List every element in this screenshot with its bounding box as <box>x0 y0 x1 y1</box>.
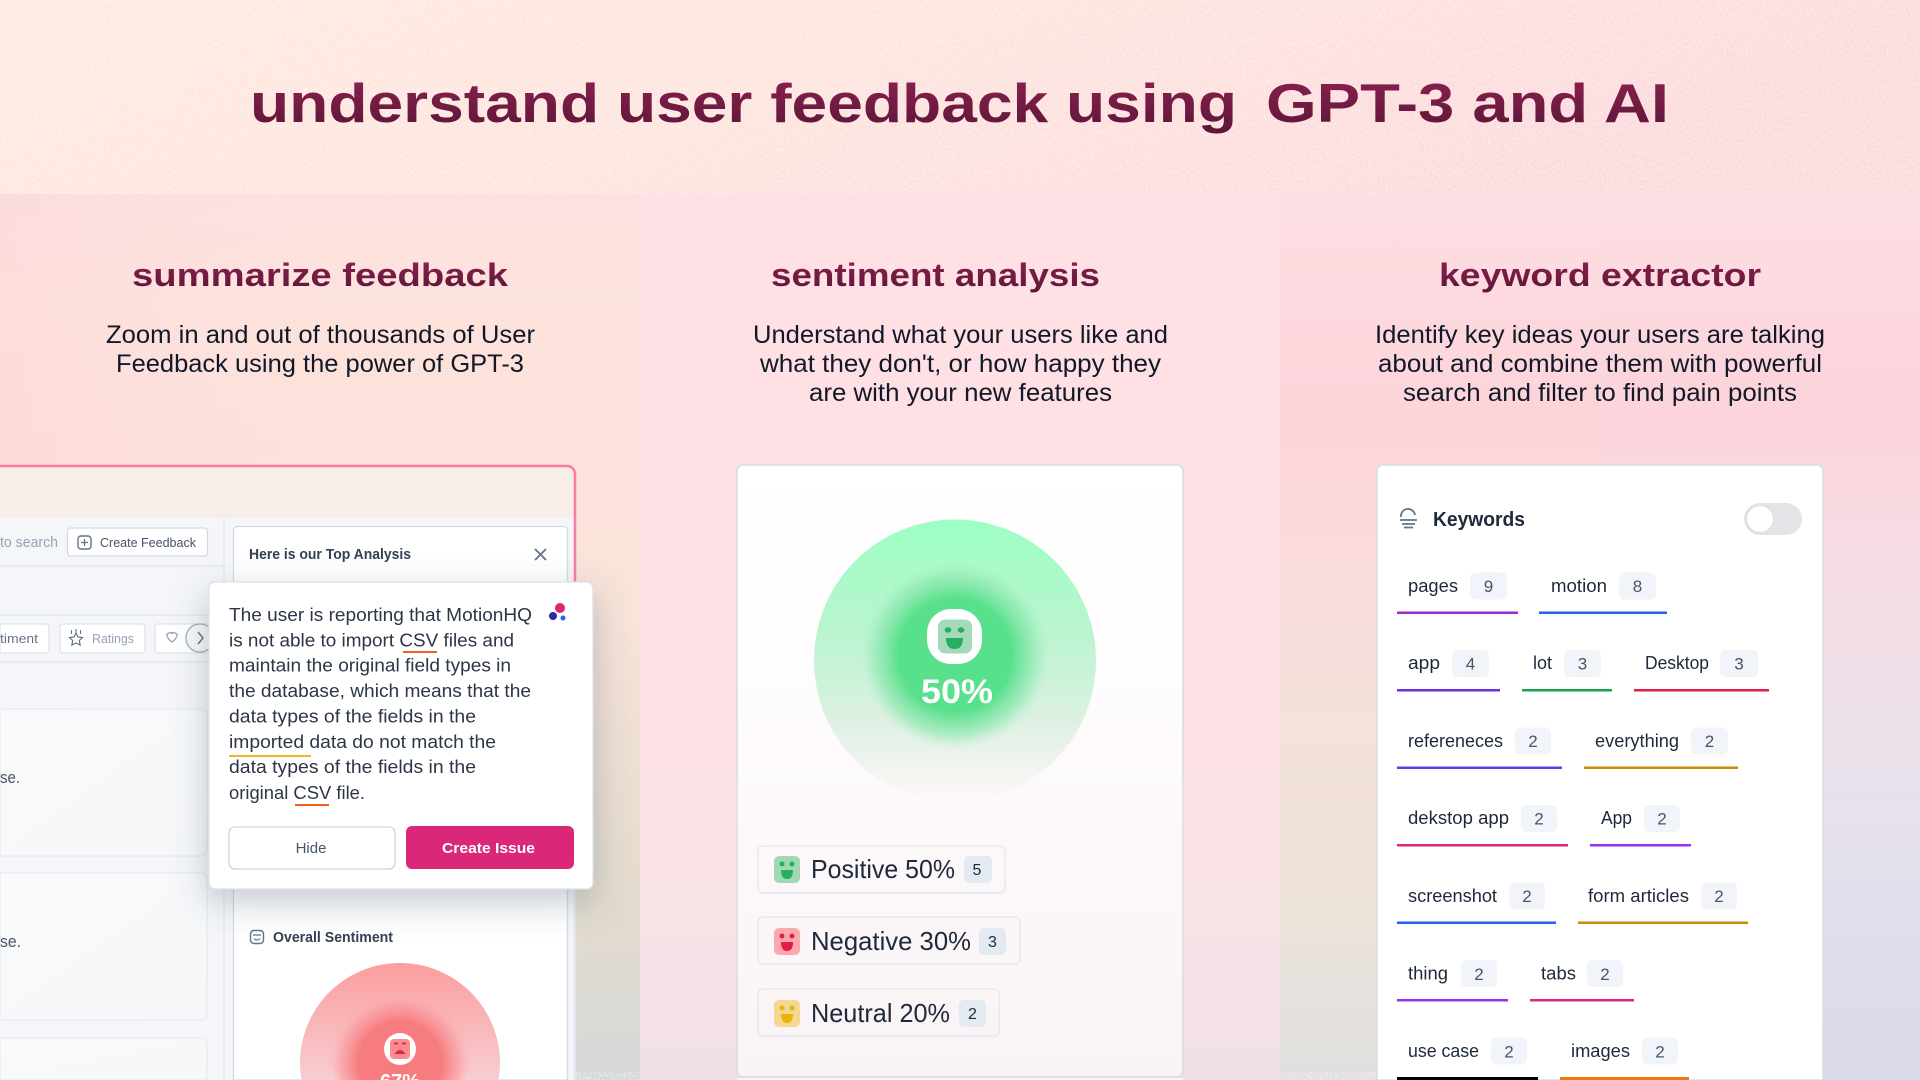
title: understand user feedback using <box>250 72 1237 134</box>
legend: negative: 3 <box>988 934 997 951</box>
keyword: pages: 9 <box>1484 577 1493 596</box>
sentiment filter chip: timent <box>0 631 38 646</box>
keyword: lot <box>1522 650 1612 692</box>
hide button <box>229 827 395 869</box>
sentiment filter chip <box>0 624 49 653</box>
keyword: motion: motion <box>1551 576 1607 596</box>
summary text: original CSV file. <box>229 783 365 803</box>
legend: positive: 5 <box>973 862 982 879</box>
keyword: screenshot: screenshot <box>1408 886 1497 906</box>
column 1 heading: summarize feedback: summarize feedback <box>132 257 508 293</box>
keyword: dekstop app <box>1397 805 1568 846</box>
keyword: everything <box>1584 728 1738 769</box>
legend: positive: Positive 50% <box>811 854 955 884</box>
summary text: is not able to import CSV files and <box>229 630 514 650</box>
ratings filter chip: Ratings <box>92 631 134 646</box>
keyword: Desktop: Desktop <box>1645 653 1709 673</box>
ratings filter chip <box>60 624 145 653</box>
keyword: use case <box>1397 1038 1538 1080</box>
legend: neutral: Neutral 20% <box>811 998 950 1028</box>
keyword: dekstop app: dekstop app <box>1408 808 1509 828</box>
keyword: app: 4 <box>1466 654 1475 674</box>
panel: sentiment analysis card <box>737 465 1183 1080</box>
keyword: thing: 2 <box>1474 965 1484 984</box>
search text: to search <box>0 534 58 551</box>
column 3 description <box>1375 321 1825 407</box>
keyword: tabs <box>1530 960 1634 1002</box>
keyword: pages: pages <box>1408 576 1458 596</box>
heart filter chip and scroll arrow <box>155 624 214 653</box>
column 3 description: search and filter to find pain points <box>1403 379 1797 407</box>
keyword: Desktop: 3 <box>1734 654 1744 674</box>
legend: positive <box>758 846 1005 893</box>
keyword: images: 2 <box>1655 1042 1665 1062</box>
keyword: form articles: form articles <box>1588 886 1689 906</box>
summary text: the database, which means that the <box>229 681 531 701</box>
create issue button <box>406 826 574 869</box>
summary text <box>229 605 532 803</box>
create feedback button <box>68 528 208 556</box>
keyword: form articles <box>1578 882 1748 924</box>
keyword: refereneces: refereneces <box>1408 731 1503 751</box>
keyword: lot: lot <box>1533 653 1552 673</box>
create feedback button: Create Feedback <box>100 535 196 550</box>
column 3 description: about and combine them with powerful <box>1378 350 1822 378</box>
column 2 description: are with your new features <box>809 379 1112 407</box>
keyword: everything: 2 <box>1705 732 1714 751</box>
keyword: dekstop app: 2 <box>1534 810 1544 828</box>
keyword: use case: use case <box>1408 1041 1479 1061</box>
keyword: refereneces: 2 <box>1528 732 1538 751</box>
keyword: screenshot <box>1397 882 1556 924</box>
summary text: maintain the original field types in <box>229 656 511 676</box>
keyword: motion <box>1539 572 1667 614</box>
legend: negative: Negative 30% <box>811 926 971 956</box>
column 1 description <box>106 321 535 378</box>
analysis side panel: Here is our Top Analysis <box>249 547 411 563</box>
keyword: images: images <box>1571 1041 1630 1061</box>
keyword: app <box>1397 650 1500 692</box>
positive sentiment gauge: 50% <box>921 673 993 711</box>
keyword: lot: 3 <box>1578 654 1587 674</box>
keyword: thing: thing <box>1408 964 1448 984</box>
summary text: The user is reporting that MotionHQ <box>229 605 532 625</box>
card below sentiment card <box>737 1078 1183 1080</box>
feedback card 1: se. <box>0 768 20 787</box>
summary text: data types of the fields in the <box>229 757 476 777</box>
keyword: screenshot: 2 <box>1522 887 1532 906</box>
summary text: imported data do not match the <box>229 732 496 752</box>
positive sentiment gauge <box>814 520 1096 802</box>
keyword: Desktop <box>1634 650 1769 692</box>
keyword: tabs: tabs <box>1541 964 1576 984</box>
title <box>250 72 1669 134</box>
column 2 description: Understand what your users like and <box>753 321 1168 349</box>
toggle switch <box>1744 503 1802 535</box>
highlight underlines <box>229 651 437 806</box>
keyword: App <box>1590 805 1691 846</box>
keyword: App: 2 <box>1657 810 1667 828</box>
keyword: pages <box>1397 572 1518 614</box>
legend: neutral: 2 <box>968 1006 977 1023</box>
column 2 heading: sentiment analysis: sentiment analysis <box>771 257 1100 293</box>
keyword: form articles: 2 <box>1714 887 1724 906</box>
create issue button: Create Issue <box>442 840 535 857</box>
column 1 description: Feedback using the power of GPT-3 <box>116 350 524 378</box>
keyword: thing <box>1397 960 1508 1002</box>
legend: neutral <box>758 989 999 1036</box>
app window frame <box>0 466 575 1080</box>
keyword: everything: everything <box>1595 731 1679 751</box>
keyword: app: app <box>1408 653 1440 673</box>
feedback card 2: se. <box>0 932 21 951</box>
column 3 description: Identify key ideas your users are talking <box>1375 321 1825 349</box>
keyword: refereneces <box>1397 728 1562 769</box>
keyword: App: App <box>1601 808 1632 828</box>
title: GPT-3 and AI <box>1266 72 1669 134</box>
icon: ai dots <box>549 603 566 620</box>
feedback card 2 <box>0 873 207 1020</box>
popup: top analysis summary <box>209 582 593 889</box>
keyword: images <box>1560 1038 1689 1080</box>
hide button: Hide <box>296 840 326 857</box>
header band <box>0 0 1920 194</box>
summary text: data types of the fields in the <box>229 706 476 726</box>
keyword: tabs: 2 <box>1600 965 1610 984</box>
keywords heading: Keywords <box>1433 509 1525 531</box>
keyword: use case: 2 <box>1504 1042 1514 1062</box>
column 1 description: Zoom in and out of thousands of User <box>106 321 535 349</box>
column 2 description <box>753 321 1168 407</box>
column 3 heading: keyword extractor: keyword extractor <box>1439 257 1761 293</box>
column 2 description: what they don't, or how happy they <box>759 350 1162 378</box>
overall sentiment label: Overall Sentiment <box>273 930 393 946</box>
icon: cloud <box>1400 509 1417 528</box>
feedback card 1 <box>0 709 207 856</box>
panel: app screenshot <box>0 466 593 1080</box>
legend: negative <box>758 917 1020 964</box>
analysis side panel <box>234 526 568 1080</box>
feedback card 3 <box>0 1038 207 1080</box>
panel: keywords card <box>1377 465 1823 1080</box>
negative sentiment gauge <box>300 963 500 1080</box>
keyword: motion: 8 <box>1633 577 1642 596</box>
